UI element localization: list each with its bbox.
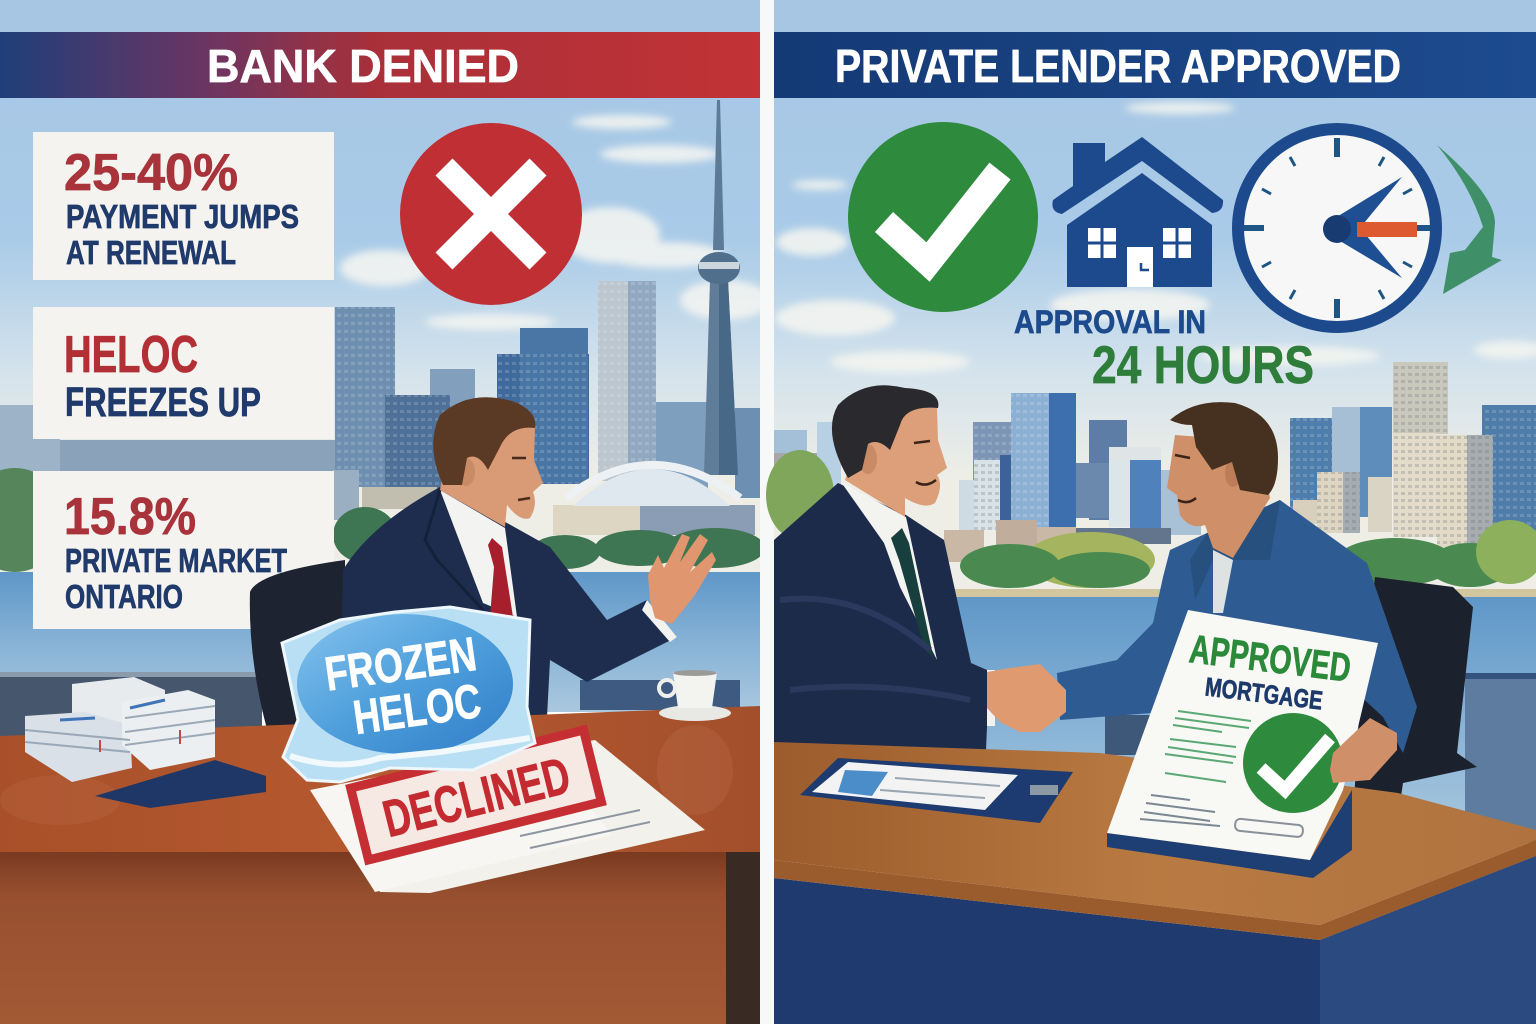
tie xyxy=(488,538,513,617)
stat card: private market: ONTARIO xyxy=(65,578,183,615)
eye and mouth xyxy=(512,458,530,500)
frozen HELOC ice block xyxy=(282,607,535,782)
undershirt xyxy=(1213,550,1233,613)
shirt body xyxy=(1057,500,1417,753)
panel: private lender approved xyxy=(766,0,1536,1024)
trees xyxy=(766,450,1536,588)
sky background xyxy=(0,0,760,600)
shirt cuff xyxy=(987,670,995,726)
document: approved mortgage xyxy=(1107,610,1378,878)
hair xyxy=(1170,402,1278,495)
CN Tower xyxy=(698,100,740,475)
suit body xyxy=(340,487,677,717)
stat card: private market: PRIVATE MARKET xyxy=(65,542,287,579)
lake xyxy=(774,597,1536,840)
stat card: payment jumps: PAYMENT JUMPS xyxy=(66,198,299,235)
stat card: payment jumps: 25-40% xyxy=(64,144,238,202)
stat card: payment jumps: AT RENEWAL xyxy=(66,234,236,271)
panel: bank denied xyxy=(0,0,770,1024)
frozen HELOC ice block: HELOC xyxy=(350,675,484,745)
chair back behind lender xyxy=(1105,715,1155,755)
clouds xyxy=(775,102,1536,373)
skyline: Toronto with CN Tower xyxy=(0,100,765,572)
stat card: payment jumps xyxy=(33,132,334,280)
frozen HELOC ice block: FROZEN xyxy=(322,628,480,702)
head xyxy=(1167,435,1270,558)
approval in 24 hours: APPROVAL IN xyxy=(1014,304,1206,340)
shirt cuff xyxy=(642,600,677,642)
suit xyxy=(774,483,987,750)
shirt xyxy=(440,490,517,617)
icon: house xyxy=(1052,137,1223,287)
icon: red X xyxy=(400,123,582,305)
approval in 24 hours: 24 HOURS xyxy=(1092,336,1314,395)
stat card: HELOC freezes: HELOC xyxy=(64,326,198,384)
lapel xyxy=(425,490,483,610)
paper stacks xyxy=(25,677,266,808)
ear xyxy=(457,458,475,486)
chair xyxy=(250,560,345,745)
chair xyxy=(1353,577,1477,817)
borrower hand xyxy=(1330,718,1397,783)
clouds xyxy=(340,115,770,330)
tie xyxy=(891,528,934,660)
ear xyxy=(1225,459,1241,487)
stat card: HELOC freezes xyxy=(33,307,334,439)
stat card: HELOC freezes: FREEZES UP xyxy=(65,379,261,425)
domed stadium xyxy=(553,465,755,535)
ear xyxy=(859,444,877,474)
document: approved mortgage: APPROVED xyxy=(1187,627,1353,691)
raised hand xyxy=(648,534,716,624)
stamp: declined xyxy=(351,730,601,860)
lake xyxy=(0,572,760,712)
coffee cup xyxy=(659,670,731,721)
head xyxy=(845,405,947,517)
handshake xyxy=(987,664,1066,732)
icon: green check xyxy=(848,122,1038,312)
office wall right xyxy=(1465,673,1536,843)
desk xyxy=(774,742,1536,1024)
jacket sleeve shading xyxy=(780,599,970,700)
stat card: private market: 15.8% xyxy=(64,488,196,546)
lender figure xyxy=(774,385,995,750)
banker figure xyxy=(340,397,716,717)
stat card: private market xyxy=(33,471,334,629)
office wall and credenza xyxy=(0,672,262,738)
skyline xyxy=(766,362,1536,588)
shoreline xyxy=(945,589,1536,597)
documents: declined xyxy=(310,740,705,893)
clipboard xyxy=(800,758,1073,823)
banner: private lender approved xyxy=(774,32,1536,98)
banner: bank denied xyxy=(0,32,760,98)
stamp: declined: DECLINED xyxy=(378,747,576,849)
document: approved mortgage: MORTGAGE xyxy=(1203,671,1324,716)
borrower figure xyxy=(1057,402,1417,753)
desk xyxy=(0,706,760,1024)
hair xyxy=(433,397,535,485)
divider xyxy=(760,0,774,1024)
approval in 24 hours xyxy=(1014,304,1314,395)
hair xyxy=(832,385,938,478)
trees xyxy=(0,468,765,572)
icon: clock with arrow xyxy=(1238,129,1502,327)
shirt xyxy=(841,482,937,660)
banner: private lender approved: PRIVATE LENDER APPROVED xyxy=(835,40,1401,92)
banner: bank denied: BANK DENIED xyxy=(207,40,519,92)
eye and smile xyxy=(914,441,936,485)
eye and smile xyxy=(1175,455,1196,502)
sky background xyxy=(774,0,1536,610)
collar xyxy=(1190,500,1280,600)
head xyxy=(440,420,543,527)
arrow xyxy=(1437,145,1502,294)
